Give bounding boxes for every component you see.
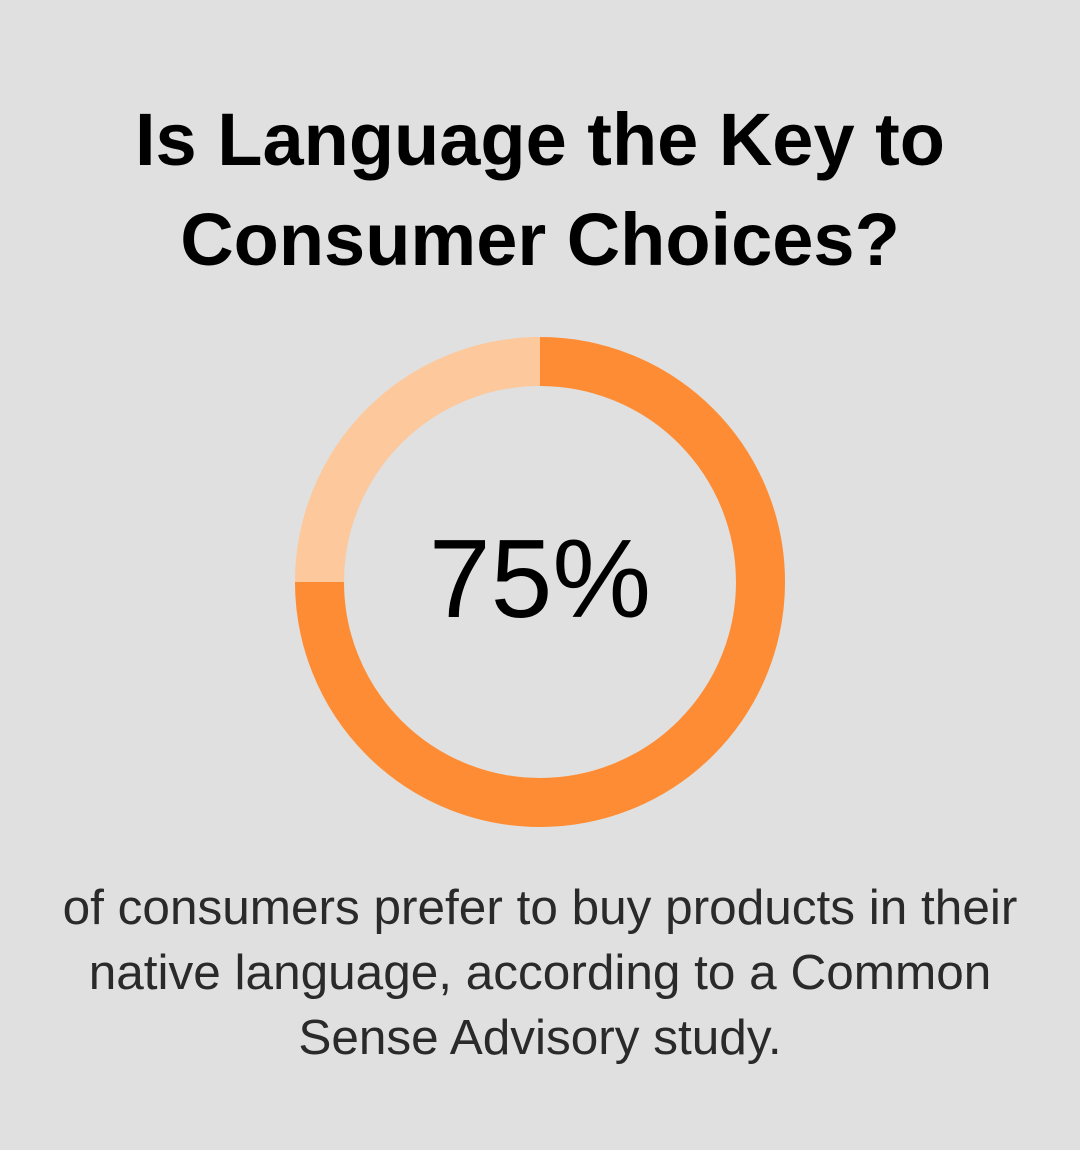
donut chart [295, 337, 785, 827]
description text: Sense Advisory study. [298, 1010, 782, 1065]
ring: 75% segment [320, 362, 760, 802]
description text: of consumers prefer to buy products in their [63, 880, 1017, 935]
description text [63, 880, 1017, 1065]
title [135, 98, 945, 281]
title: Is Language the Key to [135, 98, 945, 181]
ring: remaining 25% [320, 362, 760, 802]
title: Consumer Choices? [180, 198, 900, 281]
stat value: 75% [429, 517, 651, 641]
description text: native language, according to a Common [89, 945, 991, 1000]
